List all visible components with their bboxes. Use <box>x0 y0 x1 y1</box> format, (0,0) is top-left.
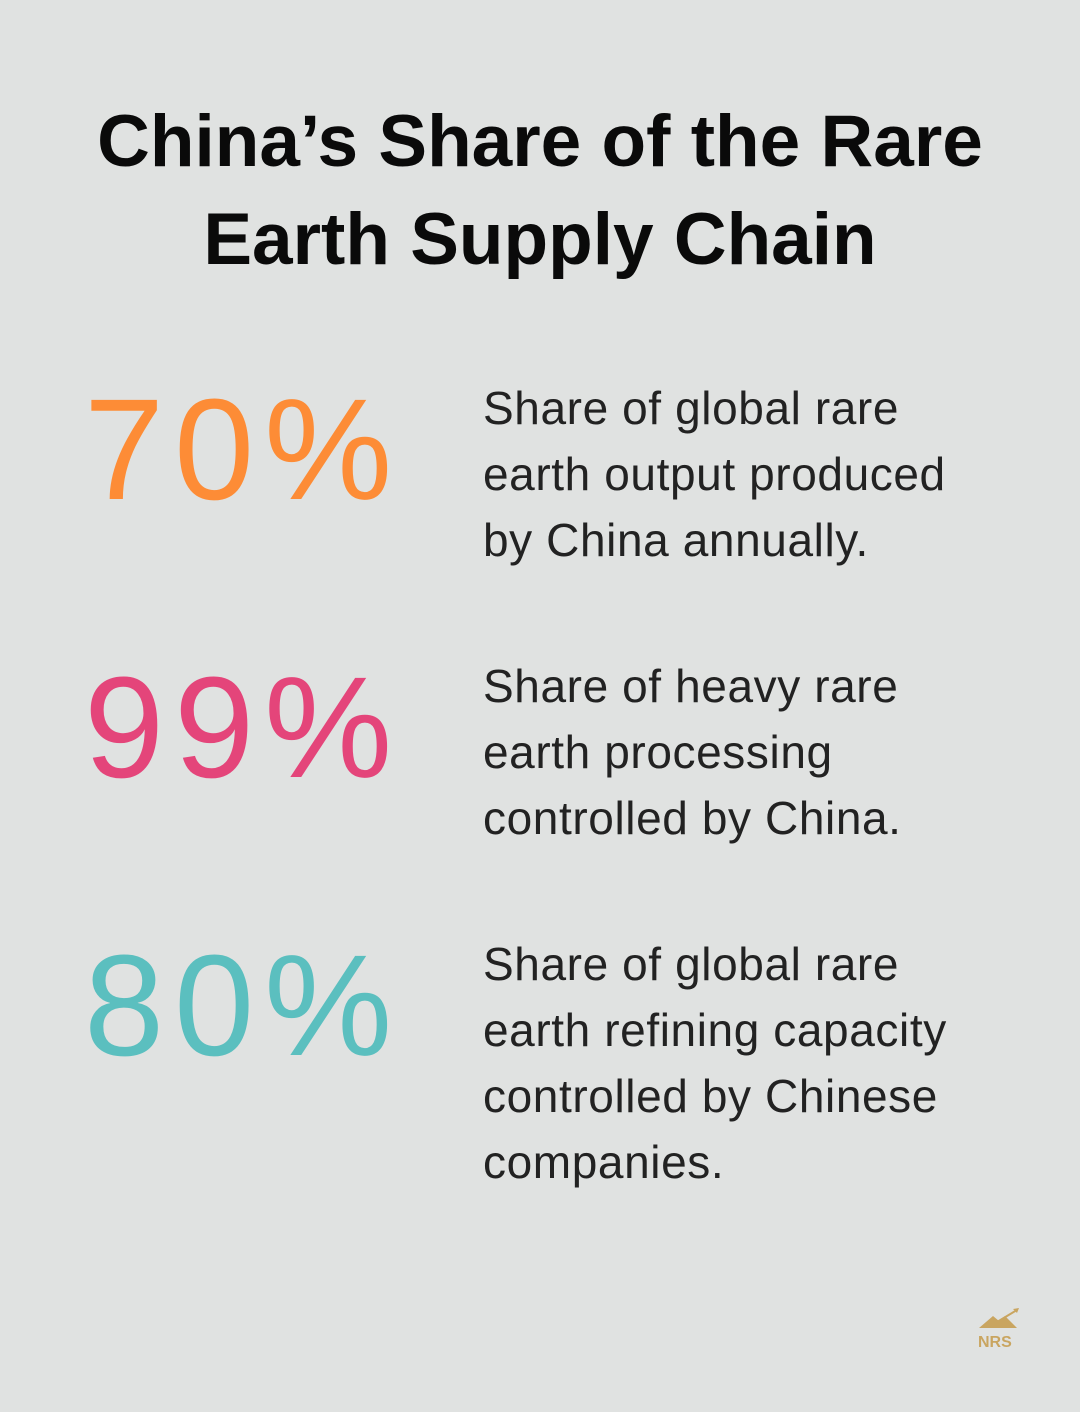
description: by China annually. <box>483 514 869 566</box>
description <box>483 938 947 1188</box>
stat row: 99% <box>84 647 902 844</box>
number 80%: 80% <box>84 925 402 1086</box>
description: earth output produced <box>483 448 946 500</box>
logo: NRS: NRS <box>978 1334 1012 1351</box>
description: Share of global rare <box>483 382 899 434</box>
title <box>97 101 983 280</box>
description: earth refining capacity <box>483 1004 947 1056</box>
number 70%: 70% <box>84 369 402 530</box>
description <box>483 382 946 566</box>
description <box>483 660 902 844</box>
description: controlled by China. <box>483 792 902 844</box>
description: earth processing <box>483 726 833 778</box>
description: Share of heavy rare <box>483 660 898 712</box>
stat row: 70% <box>84 369 946 566</box>
description: companies. <box>483 1136 724 1188</box>
stat row: 80% <box>84 925 947 1188</box>
description: Share of global rare <box>483 938 899 990</box>
title: Earth Supply Chain <box>203 199 877 280</box>
description: controlled by Chinese <box>483 1070 938 1122</box>
title: China’s Share of the Rare <box>97 101 983 182</box>
number 99%: 99% <box>84 647 402 808</box>
logo: NRS <box>978 1308 1019 1351</box>
